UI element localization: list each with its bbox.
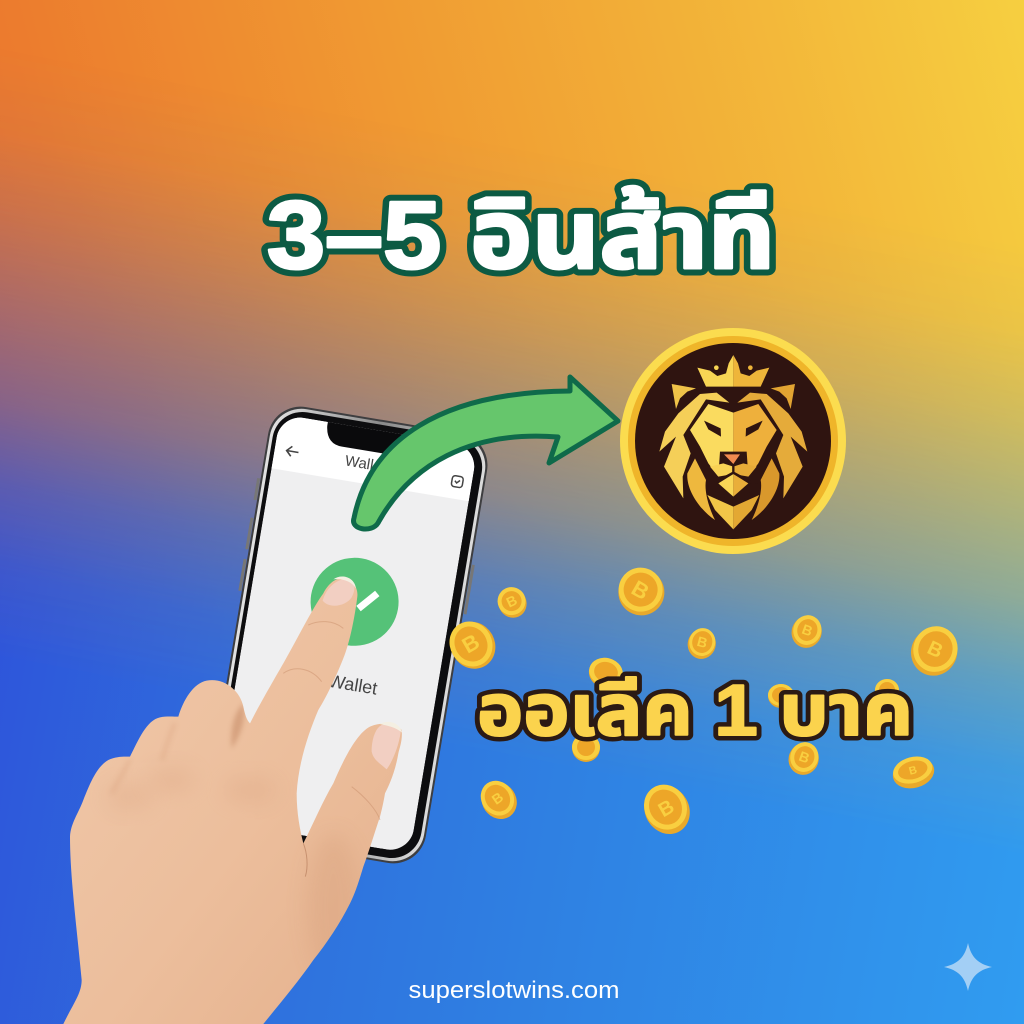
green confirm button [310,558,399,646]
coin [441,613,504,677]
beard [707,495,733,529]
title: 3-5 minutes: 3–5 อินส้าที [267,182,775,289]
coin: B [504,592,520,610]
lion emblem [659,355,807,529]
coin: B [800,621,815,639]
website url: superslotwins.com [408,977,620,1004]
muzzle [710,463,733,477]
thumb nail [372,725,401,769]
wallet label: Wallet [327,671,379,699]
coin [889,752,938,793]
coin [635,776,699,842]
coin [684,625,719,662]
crown [697,355,733,387]
coin: B [627,575,654,605]
coin [585,654,626,692]
mane right [737,393,807,498]
face [690,404,733,477]
notch [327,422,402,454]
hand silhouette [63,578,402,1024]
hand [63,577,402,1024]
snout lines [710,466,757,504]
sparkle icon [944,943,992,991]
finger creases [283,622,380,877]
phone frame [202,402,492,868]
back arrow icon [286,446,299,457]
nose [720,452,747,466]
phone [226,406,488,864]
hand shading [107,703,360,980]
coin: B [489,789,506,808]
wallet icon [451,475,464,488]
coins [441,560,966,842]
coin [493,582,531,622]
mane left [659,393,729,498]
coin: B [458,629,484,658]
coin: B [797,748,812,766]
coin [609,560,673,624]
title: 3-5 minutes: 3–5 อินส้าที [267,182,775,289]
header title: Wallet [344,452,388,476]
coin: B [695,633,709,651]
coin [473,774,524,826]
app header [271,414,478,501]
index fingernail [323,579,354,606]
phone screen [234,418,474,850]
ears [672,384,696,409]
coin [875,679,899,703]
lion badge [620,328,846,554]
subtitle: withdraw 1 baht: ออเลีค 1 บาค [477,671,913,751]
coin [784,738,824,779]
coin [903,619,966,683]
coin: B [908,764,918,778]
coin: B [924,637,946,663]
coin: B [655,796,678,822]
coin [572,734,600,762]
coin [768,684,794,708]
phone side buttons [240,478,482,628]
badge rings [620,328,846,554]
arrow [354,377,618,529]
eyes [704,421,721,437]
coin [787,611,827,652]
check mark [359,591,377,611]
subtitle: withdraw 1 baht: ออเลีค 1 บาค [477,671,913,751]
